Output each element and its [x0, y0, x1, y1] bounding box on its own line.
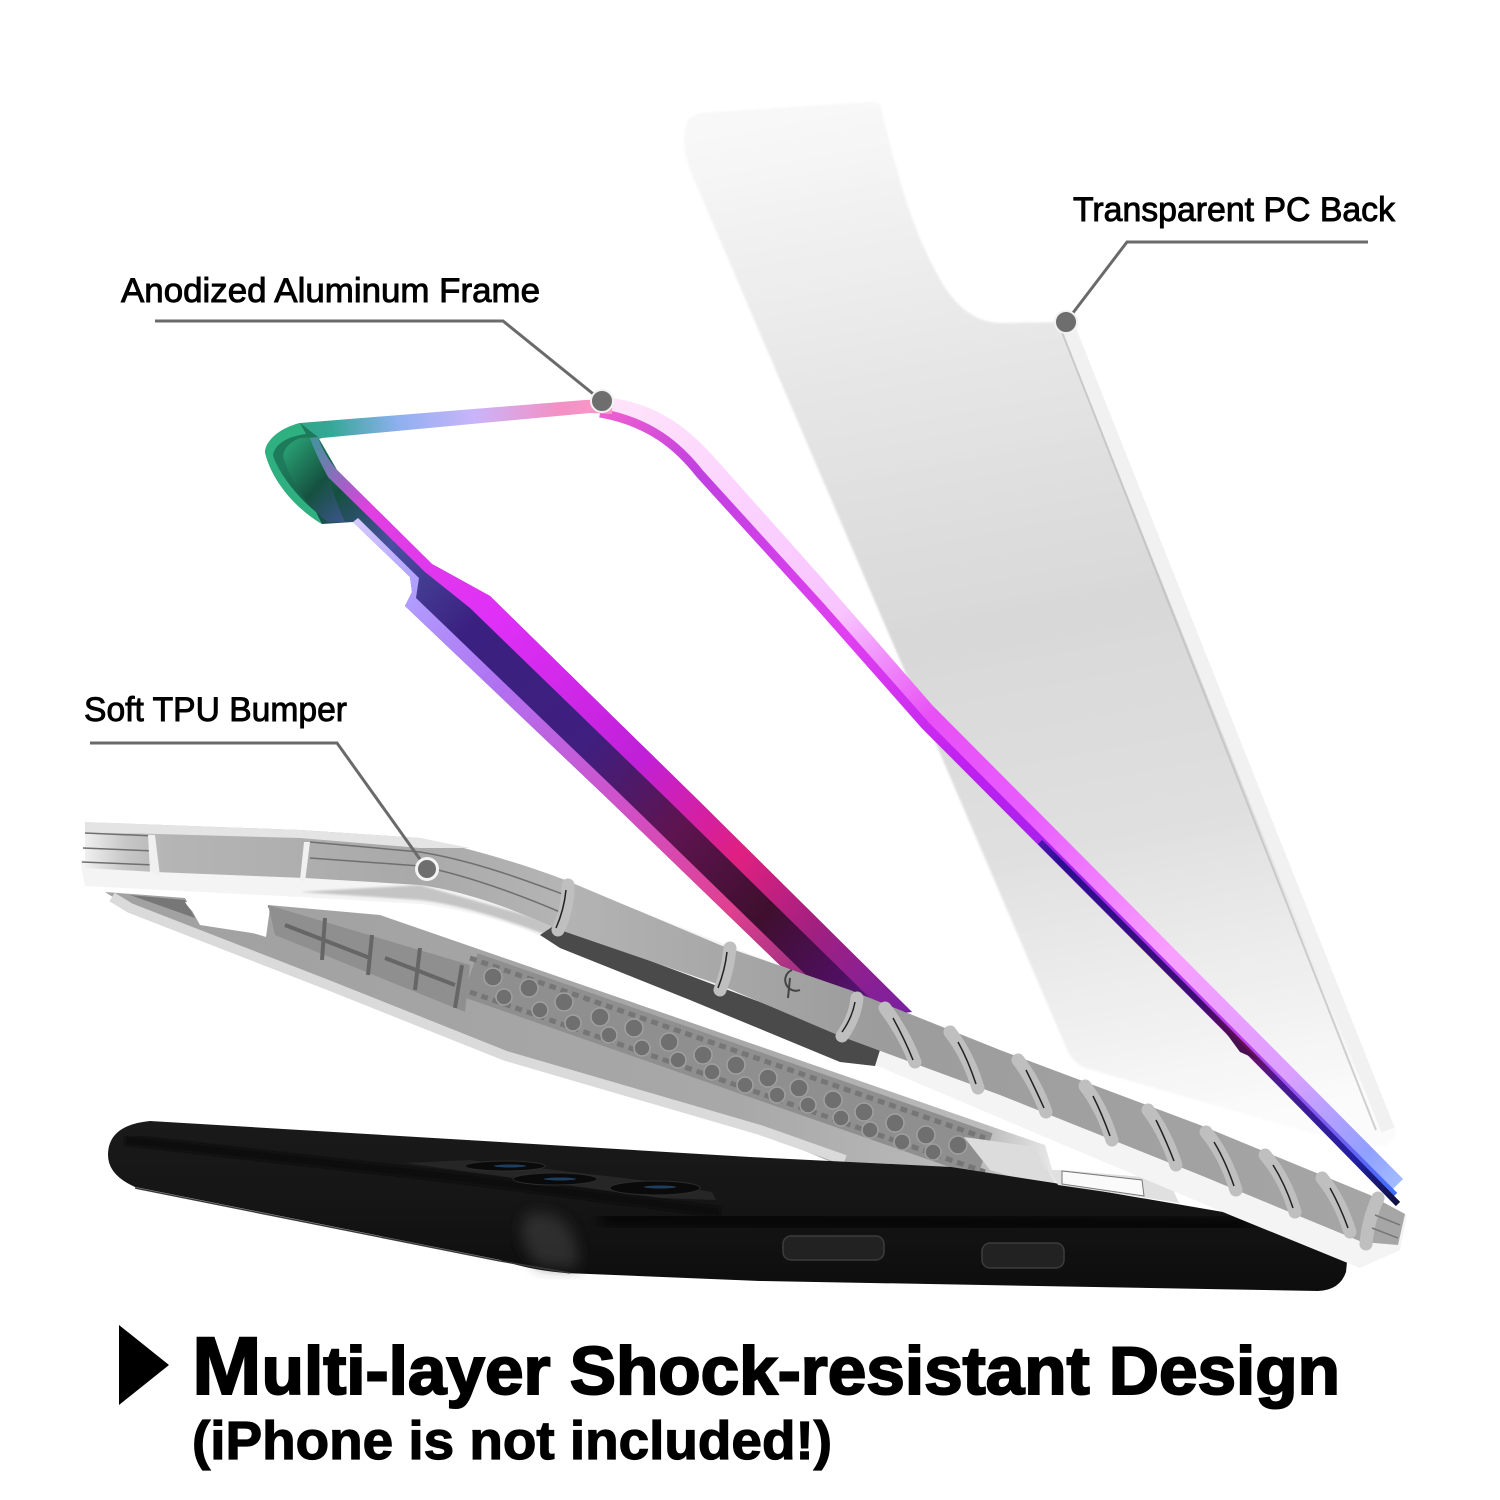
- subheading: (iPhone is not included!): [192, 1411, 832, 1471]
- camera lenses: [405, 1160, 716, 1200]
- frame: right side: [600, 408, 1398, 1204]
- callout: Soft TPU Bumper: [84, 691, 438, 880]
- embossed crosses: [285, 918, 462, 1008]
- clear connector: [1036, 1147, 1179, 1203]
- bumper: grey band: [85, 822, 1405, 1245]
- honeycomb band: [470, 958, 985, 1172]
- transparent PC back panel: [684, 102, 1395, 1146]
- soft TPU bumper: [80, 822, 1407, 1268]
- icon: arrow: [119, 1325, 169, 1405]
- callout: Anodized Aluminum Frame: Anodized Aluminum Frame: [121, 272, 540, 310]
- callout: Anodized Aluminum Frame: [121, 272, 613, 412]
- bumper: dark underside: [540, 925, 880, 1066]
- callout: Transparent PC Back: [1055, 191, 1396, 333]
- honeycomb bubbles: [484, 968, 967, 1160]
- bumper: grooves: [82, 833, 565, 912]
- side buttons: [783, 1236, 1064, 1268]
- frame: left arm: [265, 423, 912, 1015]
- phone: [108, 1121, 1361, 1291]
- callout: Soft TPU Bumper: Soft TPU Bumper: [84, 691, 347, 729]
- power icon: [785, 970, 800, 998]
- heading: Multi-layer Shock-resistant Design: [192, 1321, 1340, 1412]
- bumper: white rim: [80, 838, 1407, 1268]
- callout: Transparent PC Back: Transparent PC Back: [1073, 191, 1396, 229]
- inner textured bumper strip: [105, 892, 1058, 1190]
- anodized aluminum frame: [265, 399, 1398, 1204]
- bumper: ribs: [558, 885, 1378, 1244]
- frame: top edge: [300, 399, 612, 445]
